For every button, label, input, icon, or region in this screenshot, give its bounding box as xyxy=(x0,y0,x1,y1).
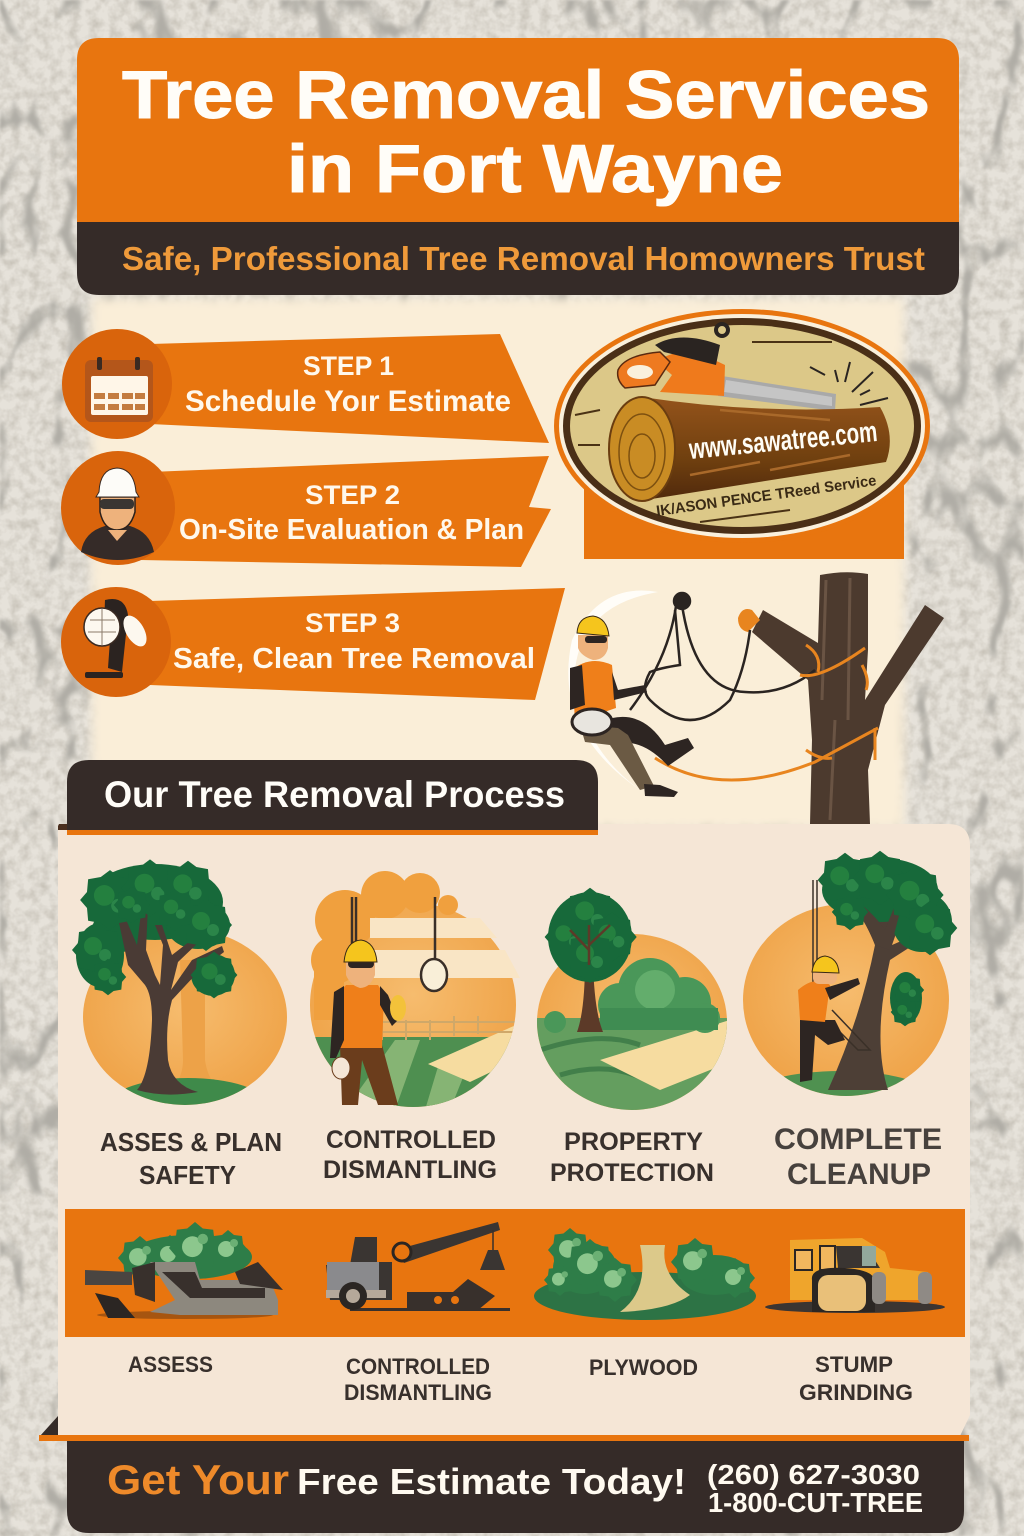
pulley and ropes xyxy=(630,593,815,720)
title: in Fort Wayne xyxy=(287,131,783,207)
crescent xyxy=(568,591,658,790)
orange circle xyxy=(743,904,949,1096)
label: controlled dismantling: CONTROLLED xyxy=(346,1354,490,1379)
trunk xyxy=(118,905,224,1095)
heading accent line xyxy=(67,830,598,835)
step 1 text: Schedule Yoır Estimate xyxy=(185,385,511,418)
title xyxy=(122,57,930,207)
section heading xyxy=(52,760,598,838)
illustration: worker with rigging xyxy=(300,871,520,1117)
step 3 text: STEP 3 xyxy=(305,608,400,638)
label: controlled dismantling: CONTROLLED xyxy=(326,1126,496,1154)
step 3 xyxy=(61,587,565,700)
label: controlled dismantling: DISMANTLING xyxy=(323,1156,497,1184)
ground and path xyxy=(537,1018,727,1110)
footer call to action: Free Estimate Today! xyxy=(297,1461,686,1502)
footer call to action: Get Your xyxy=(107,1456,289,1503)
orange equipment strip xyxy=(65,1209,965,1337)
label: asses & plan safety: ASSES & PLAN xyxy=(100,1127,282,1157)
logo badge xyxy=(554,309,930,543)
footer accent line xyxy=(39,1435,969,1441)
orange block behind logo xyxy=(584,480,904,559)
bushes xyxy=(544,958,720,1033)
step 3 ribbon xyxy=(150,588,565,700)
header orange block xyxy=(77,38,959,240)
step 1 text xyxy=(185,351,511,418)
process panel xyxy=(58,824,970,1436)
label: complete cleanup: CLEANUP xyxy=(787,1158,931,1191)
ground xyxy=(315,1016,515,1107)
orange circle xyxy=(83,929,287,1105)
step 2 xyxy=(61,451,551,567)
step 2 text: On-Site Evaluation & Plan xyxy=(179,514,524,546)
label: complete cleanup xyxy=(774,1123,942,1191)
ground xyxy=(126,1078,247,1105)
chainsaw xyxy=(618,324,888,411)
label: property protection: PROPERTY xyxy=(564,1128,703,1156)
icon labels row xyxy=(100,1123,942,1191)
subtitle: Safe, Professional Tree Removal Homowners Trust xyxy=(122,240,925,277)
step 2 ribbon xyxy=(140,456,551,567)
label: asses & plan safety: SAFETY xyxy=(139,1160,236,1190)
grain marks xyxy=(575,342,880,522)
climber xyxy=(798,956,860,1082)
footer phone numbers: (260) 627-3030 xyxy=(707,1459,920,1490)
climber and tree illustration xyxy=(568,572,944,824)
label: asses & plan safety xyxy=(100,1127,282,1190)
canopy mass xyxy=(822,858,952,1024)
icon: bushes and path xyxy=(534,1228,756,1320)
footer call to action xyxy=(107,1456,686,1503)
label: property protection: PROTECTION xyxy=(550,1159,714,1187)
hooks xyxy=(352,897,447,991)
orange background xyxy=(310,903,516,1107)
heading tab xyxy=(67,760,598,830)
worker xyxy=(330,940,406,1105)
canopy xyxy=(818,851,957,1026)
footer bar xyxy=(39,1416,969,1533)
step 1 text: STEP 1 xyxy=(303,351,394,381)
label: controlled dismantling xyxy=(323,1126,497,1184)
icon: crane truck xyxy=(326,1222,510,1311)
orange circle xyxy=(537,934,727,1110)
log xyxy=(609,397,890,501)
illustration: tree assessment xyxy=(72,859,287,1130)
step 3 text: Safe, Clean Tree Removal xyxy=(173,643,535,675)
heading text: Our Tree Removal Process xyxy=(104,774,565,815)
pale rigging bands xyxy=(358,918,520,978)
label: controlled dismantling: DISMANTLING xyxy=(344,1380,492,1405)
trunk xyxy=(828,880,918,1090)
badge rings xyxy=(554,309,930,543)
header dark band xyxy=(77,222,959,295)
canopy mass xyxy=(76,864,235,996)
tree trunk and branches xyxy=(738,572,944,824)
step 1 xyxy=(62,329,549,443)
header banner xyxy=(77,38,959,295)
cream content panel xyxy=(92,298,904,828)
illustration: climber on tree xyxy=(743,851,957,1119)
illustration: property protection xyxy=(537,888,727,1110)
website text: www.sawatree.com xyxy=(687,416,879,466)
title: Tree Removal Services xyxy=(122,57,930,133)
trunk upper branches xyxy=(852,902,901,950)
label: complete cleanup: COMPLETE xyxy=(774,1123,942,1156)
footer corner fold xyxy=(40,1416,58,1436)
equipment labels row xyxy=(128,1352,913,1405)
climber xyxy=(570,616,694,797)
step 3 text xyxy=(173,608,535,675)
ground xyxy=(784,1071,905,1096)
icon: safety gear xyxy=(61,587,171,697)
icon: stump grinding machine xyxy=(765,1238,945,1313)
icon: calendar xyxy=(62,329,172,439)
rope xyxy=(813,880,870,1050)
step 1 ribbon xyxy=(150,334,549,443)
label: controlled dismantling xyxy=(344,1354,492,1405)
company name text: IK/ASON PENCE TReed Service xyxy=(655,472,877,520)
label: stump grinding: GRINDING xyxy=(799,1380,913,1405)
footer background xyxy=(67,1438,964,1533)
canopy xyxy=(72,859,237,998)
label: assess: ASSESS xyxy=(128,1352,213,1377)
heading corner fold xyxy=(52,824,67,838)
icon: stump grinder xyxy=(85,1222,283,1319)
icon: worker with white hard hat xyxy=(61,451,175,565)
footer phone numbers xyxy=(707,1459,923,1518)
step 2 text xyxy=(179,480,524,546)
label: stump grinding: STUMP xyxy=(815,1352,893,1377)
label: stump grinding xyxy=(799,1352,913,1405)
orange rope xyxy=(655,645,878,780)
step 2 text: STEP 2 xyxy=(305,480,400,510)
label: plywood: PLYWOOD xyxy=(589,1355,698,1380)
footer phone numbers: 1-800-CUT-TREE xyxy=(708,1487,923,1518)
orange tree silhouette xyxy=(311,871,458,1020)
label: property protection xyxy=(550,1128,714,1187)
tree xyxy=(545,888,637,1032)
